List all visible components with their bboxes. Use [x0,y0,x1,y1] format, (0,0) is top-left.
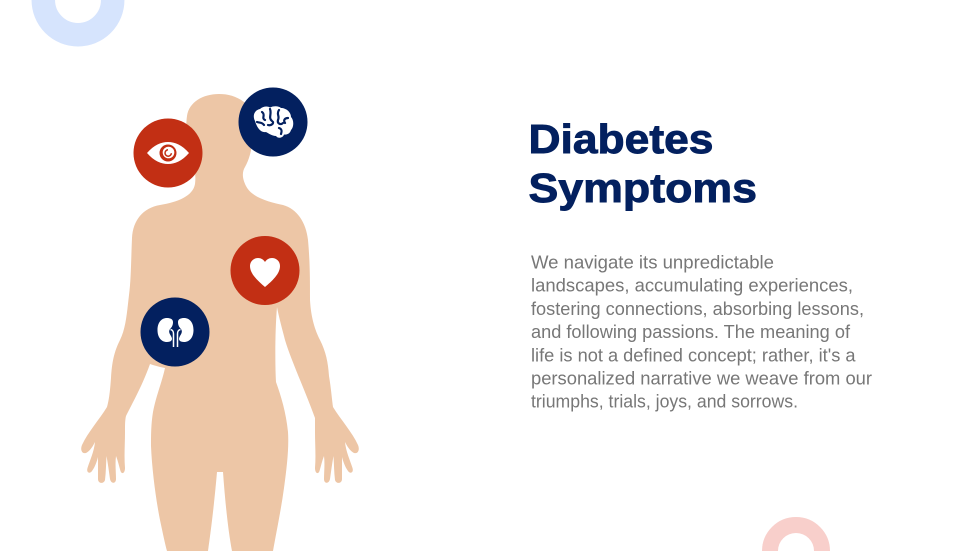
title: Symptoms [528,165,757,211]
title [528,116,757,211]
icon: brain [238,88,308,156]
body text block: life is not a defined concept; rather, it's a [531,344,856,365]
icon: eye [134,118,202,188]
decorative ring: top left [43,0,113,35]
body text block: and following passions. The meaning of [531,321,851,342]
decorative ring: bottom right [770,525,822,551]
body text block: triumphs, trials, joys, and sorrows. [531,391,798,412]
body text block: landscapes, accumulating experiences, [531,275,853,296]
body text block: We navigate its unpredictable [531,252,774,272]
body text block [531,252,872,412]
human body silhouette [81,94,359,551]
icon: kidneys [140,298,210,366]
icon: heart [230,236,300,305]
body text block: personalized narrative we weave from our [531,368,872,388]
title: Diabetes [528,116,714,162]
body text block: fostering connections, absorbing lessons, [531,298,864,319]
